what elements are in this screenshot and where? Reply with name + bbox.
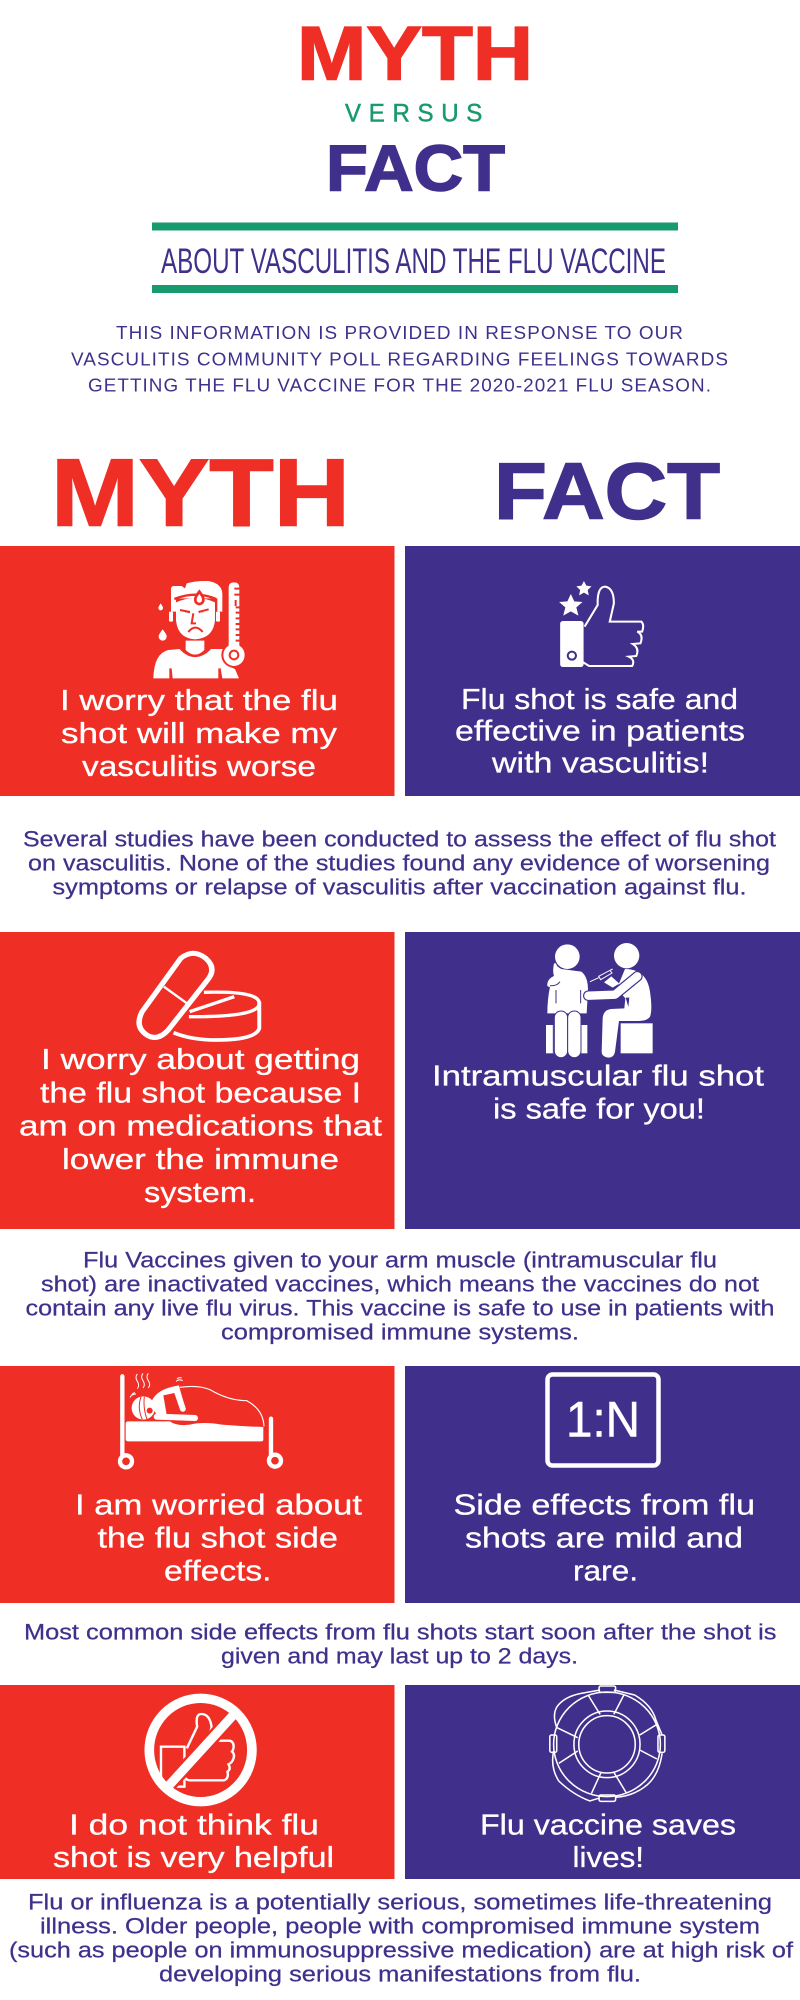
myth text 1: shot will make my	[61, 718, 338, 750]
panel: fact 2	[405, 932, 800, 1229]
panel: fact 4	[405, 1685, 800, 1879]
icon: 1:N ratio box	[548, 1374, 658, 1466]
explanation 2: Flu Vaccines given to your arm muscle (intramuscular flu	[83, 1248, 717, 1273]
fact text 1: with vasculitis!	[491, 748, 709, 780]
explanation 3: given and may last up to 2 days.	[221, 1643, 578, 1668]
myth text 4	[53, 1809, 334, 1874]
fact text 3: Side effects from flu	[454, 1489, 755, 1521]
explanation 2: contain any live flu virus. This vaccine is safe to use in patients with	[26, 1296, 774, 1321]
explanation 4	[9, 1889, 794, 1986]
explanation 1	[23, 827, 776, 900]
explanation 2	[26, 1248, 774, 1345]
fact text 1: Flu shot is safe and	[461, 684, 738, 716]
intro text: GETTING THE FLU VACCINE FOR THE 2020-2021 FLU SEASON.	[88, 376, 712, 396]
icon: life buoy	[550, 1686, 665, 1801]
myth text 2: the flu shot because I	[40, 1077, 361, 1109]
fact text 4: Flu vaccine saves	[480, 1809, 736, 1841]
explanation 3: Most common side effects from flu shots start soon after the shot is	[24, 1619, 776, 1644]
intro text: VASCULITIS COMMUNITY POLL REGARDING FEELINGS TOWARDS	[71, 350, 729, 370]
panel: myth 3	[0, 1366, 394, 1603]
fact text 4: lives!	[572, 1842, 644, 1874]
explanation 1: symptoms or relapse of vasculitis after vaccination against flu.	[52, 875, 746, 900]
intro text	[71, 323, 729, 396]
myth text 2	[19, 1044, 382, 1209]
fact text 3: shots are mild and	[465, 1523, 743, 1555]
myth text 2: lower the immune	[62, 1144, 339, 1176]
panel: myth 4	[0, 1685, 394, 1879]
panel: fact 1	[405, 546, 800, 796]
myth text 2: system.	[144, 1177, 256, 1209]
icon: patient receiving injection	[546, 943, 653, 1058]
explanation 1: Several studies have been conducted to assess the effect of flu shot	[23, 827, 776, 852]
title: fact: FACT	[326, 132, 505, 204]
fact text 3	[454, 1489, 755, 1587]
explanation 4: developing serious manifestations from flu.	[159, 1961, 641, 1986]
icon: person sick in bed	[120, 1373, 281, 1467]
fact text 2: Intramuscular flu shot	[432, 1061, 764, 1093]
title: versus: VERSUS	[345, 100, 490, 128]
explanation 3	[24, 1619, 776, 1668]
myth text 3	[75, 1489, 362, 1587]
myth text 1	[60, 685, 338, 783]
myth text 4: shot is very helpful	[53, 1842, 334, 1874]
explanation 2: compromised immune systems.	[221, 1320, 579, 1345]
title block	[297, 12, 533, 204]
title: myth: MYTH	[297, 12, 533, 96]
myth text 2: am on medications that	[19, 1111, 382, 1143]
column heading: fact: FACT	[494, 446, 720, 536]
icon: thumbs up with stars	[559, 581, 643, 667]
myth text 3: the flu shot side	[98, 1523, 338, 1555]
myth text 1: vasculitis worse	[82, 751, 316, 783]
icon: 1:N ratio box: 1:N	[566, 1392, 640, 1448]
icon: pills	[139, 953, 259, 1040]
panel: myth 1	[0, 546, 394, 796]
fact text 4	[480, 1809, 736, 1874]
intro text: THIS INFORMATION IS PROVIDED IN RESPONSE TO OUR	[116, 323, 684, 343]
icon: sick person with thermometer	[153, 581, 247, 678]
myth text 2: I worry about getting	[41, 1044, 360, 1076]
icon: prohibited thumbs up	[149, 1698, 252, 1802]
explanation 2: shot) are inactivated vaccines, which means the vaccines do not	[41, 1272, 759, 1297]
column heading: myth: MYTH	[51, 440, 350, 546]
explanation 4: illness. Older people, people with compromised immune system	[40, 1913, 760, 1938]
fact text 1	[455, 684, 745, 780]
fact text 2: is safe for you!	[493, 1093, 705, 1125]
explanation 4: Flu or influenza is a potentially serious, sometimes life-threatening	[28, 1889, 772, 1914]
panel: myth 2	[0, 932, 394, 1229]
myth text 1: I worry that the flu	[60, 685, 338, 717]
fact text 2	[432, 1061, 764, 1125]
panel: fact 3	[405, 1366, 800, 1603]
subtitle with green rules	[152, 222, 678, 293]
fact text 3: rare.	[573, 1555, 638, 1587]
myth text 4: I do not think flu	[69, 1809, 319, 1841]
myth text 3: effects.	[164, 1555, 272, 1587]
explanation 1: on vasculitis. None of the studies found any evidence of worsening	[28, 851, 770, 876]
explanation 4: (such as people on immunosuppressive medication) are at high risk of	[9, 1937, 794, 1962]
myth text 3: I am worried about	[75, 1489, 362, 1521]
fact text 1: effective in patients	[455, 716, 745, 748]
